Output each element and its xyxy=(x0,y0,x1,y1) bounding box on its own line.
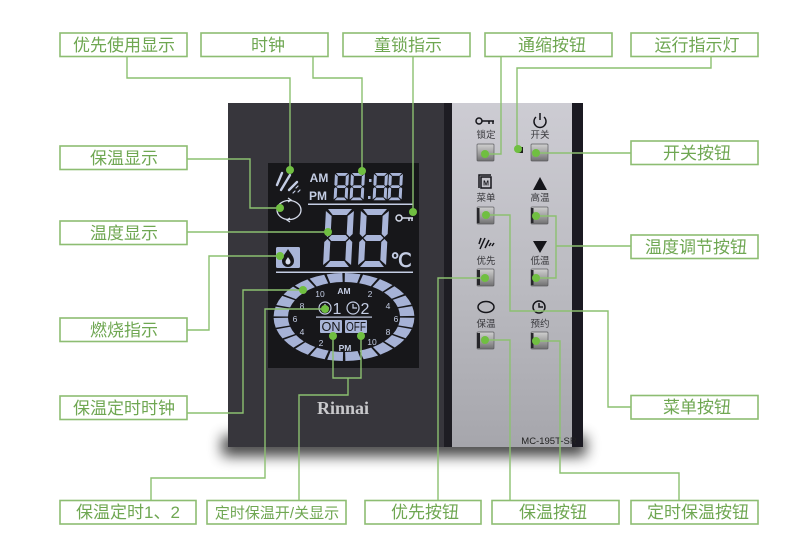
dial numbers: 6 xyxy=(394,314,399,324)
label: 保温定时1、2 xyxy=(60,500,196,524)
temperature digits xyxy=(323,209,389,267)
label: 通缩按钮 xyxy=(485,33,612,56)
panel: silver button panel xyxy=(452,103,572,447)
label: 开关按钮 xyxy=(631,141,758,164)
icon: loop xyxy=(478,302,494,312)
brand logo: Rinnai xyxy=(317,398,369,418)
timers 1 and 2: 2 xyxy=(361,301,370,318)
label: 温度显示 xyxy=(60,221,187,244)
icon: power xyxy=(534,113,546,127)
dial numbers xyxy=(293,286,399,353)
AM PM text xyxy=(309,171,328,203)
button captions: 预约 xyxy=(530,318,550,330)
leader line: 时钟 xyxy=(313,57,366,175)
leader line: 保温定时时钟 xyxy=(187,286,307,413)
label: 定时保温按钮: 定时保温按钮 xyxy=(647,503,749,522)
label: 童锁指示: 童锁指示 xyxy=(374,36,442,55)
leader line: 温度显示 xyxy=(187,228,332,236)
label: 菜单按钮 xyxy=(631,396,758,419)
button captions: 高温 xyxy=(530,192,550,204)
button captions: 低温 xyxy=(530,255,550,267)
label: 燃烧指示 xyxy=(60,318,187,342)
panel: dark body xyxy=(228,103,444,447)
icon: child lock key xyxy=(396,215,413,221)
panel: centre dark strip xyxy=(444,103,452,447)
icon: flame tile xyxy=(276,247,300,268)
clock digits xyxy=(334,173,403,200)
ON OFF tags: OFF xyxy=(346,319,366,334)
dial numbers: 4 xyxy=(300,327,305,337)
label: 开关按钮: 开关按钮 xyxy=(663,144,731,163)
model number: MC-195T-SR xyxy=(521,436,577,447)
icon: clock xyxy=(533,301,545,313)
leader line: 保温按钮 xyxy=(481,336,510,500)
label: 保温定时1、2: 保温定时1、2 xyxy=(76,503,180,522)
leader line: 开关按钮 xyxy=(532,149,631,157)
label: 优先按钮 xyxy=(365,500,481,524)
label: 时钟 xyxy=(201,33,328,56)
leader line: 定时保温开/关显示 xyxy=(299,332,365,500)
label: 优先按钮: 优先按钮 xyxy=(391,503,459,522)
leader line: 菜单按钮 xyxy=(482,211,631,407)
dial numbers: 2 xyxy=(319,338,324,348)
run indicator light xyxy=(518,147,523,153)
label: 运行指示灯: 运行指示灯 xyxy=(654,36,740,55)
button captions: 优先 xyxy=(476,255,496,267)
label: 保温定时时钟: 保温定时时钟 xyxy=(73,399,175,418)
dial numbers: 8 xyxy=(300,301,305,311)
icon: down triangle xyxy=(533,241,547,253)
button captions: 菜单 xyxy=(476,192,496,204)
thermostat controller xyxy=(228,103,583,447)
label: 运行指示灯 xyxy=(631,33,758,56)
ON OFF tags xyxy=(320,319,367,334)
leader line: 优先按钮 xyxy=(438,274,489,500)
dial numbers: 6 xyxy=(293,314,298,324)
panel: right dark edge xyxy=(572,103,583,447)
button captions: 开关 xyxy=(530,129,550,141)
icon: keep-warm loop xyxy=(277,198,301,222)
dial numbers: 4 xyxy=(386,301,391,311)
leader line: 优先使用显示 xyxy=(127,57,294,174)
dial ring xyxy=(281,278,407,356)
label: 优先使用显示 xyxy=(60,33,187,56)
timers 1 and 2: 1 xyxy=(333,301,342,318)
label: 定时保温开/关显示 xyxy=(207,500,346,524)
icon: up triangle xyxy=(533,177,547,190)
icon: menu M xyxy=(479,175,491,188)
leader line: 保温显示 xyxy=(187,159,284,212)
label: 温度调节按钮 xyxy=(631,235,758,258)
AM PM text: PM xyxy=(309,189,327,203)
dial numbers: PM xyxy=(339,343,351,353)
button captions: 锁定 xyxy=(476,129,496,141)
label: 保温定时时钟 xyxy=(60,396,187,420)
buttons xyxy=(477,144,548,349)
timers 1 and 2 xyxy=(319,301,370,318)
label: 童锁指示 xyxy=(343,33,470,56)
degree unit: ℃ xyxy=(390,251,412,272)
dial numbers: 2 xyxy=(368,289,373,299)
button captions: 保温 xyxy=(476,318,496,330)
panel: LCD display xyxy=(268,163,419,368)
leader line: 定时保温按钮 xyxy=(532,337,679,500)
leader line: 童锁指示 xyxy=(409,57,417,216)
icon: priority xyxy=(277,173,300,193)
ON OFF tags: ON xyxy=(322,319,340,334)
leader line: 温度调节按钮 xyxy=(532,212,631,282)
leader line: 通缩按钮 xyxy=(481,57,501,158)
dial numbers: AM xyxy=(337,286,351,296)
label: 温度调节按钮: 温度调节按钮 xyxy=(645,238,747,257)
label: 定时保温开/关显示: 定时保温开/关显示 xyxy=(215,505,339,522)
label: 优先使用显示: 优先使用显示 xyxy=(73,35,175,55)
label: 通缩按钮: 通缩按钮 xyxy=(518,36,586,55)
icon: lock key xyxy=(476,118,494,124)
label: 保温按钮: 保温按钮 xyxy=(519,503,587,522)
leader line: 燃烧指示 xyxy=(187,252,284,330)
label: 菜单按钮: 菜单按钮 xyxy=(663,398,731,417)
dial numbers: 10 xyxy=(367,337,377,347)
icon: menu M: M xyxy=(483,180,489,188)
leader line: 运行指示灯 xyxy=(514,57,711,153)
label: 燃烧指示: 燃烧指示 xyxy=(90,321,158,340)
label: 保温按钮 xyxy=(492,500,619,524)
label: 保温显示: 保温显示 xyxy=(90,149,158,168)
device shadow xyxy=(222,436,586,456)
leader line: 保温定时1、2 xyxy=(151,305,329,500)
label: 定时保温按钮 xyxy=(631,500,758,524)
AM PM text: AM xyxy=(310,171,328,185)
label: 保温显示 xyxy=(60,146,187,170)
icon: priority button xyxy=(479,238,494,249)
dial numbers: 10 xyxy=(315,289,325,299)
button captions xyxy=(476,129,550,330)
label: 时钟: 时钟 xyxy=(251,36,285,55)
label: 温度显示: 温度显示 xyxy=(90,224,158,243)
dial numbers: 8 xyxy=(386,327,391,337)
